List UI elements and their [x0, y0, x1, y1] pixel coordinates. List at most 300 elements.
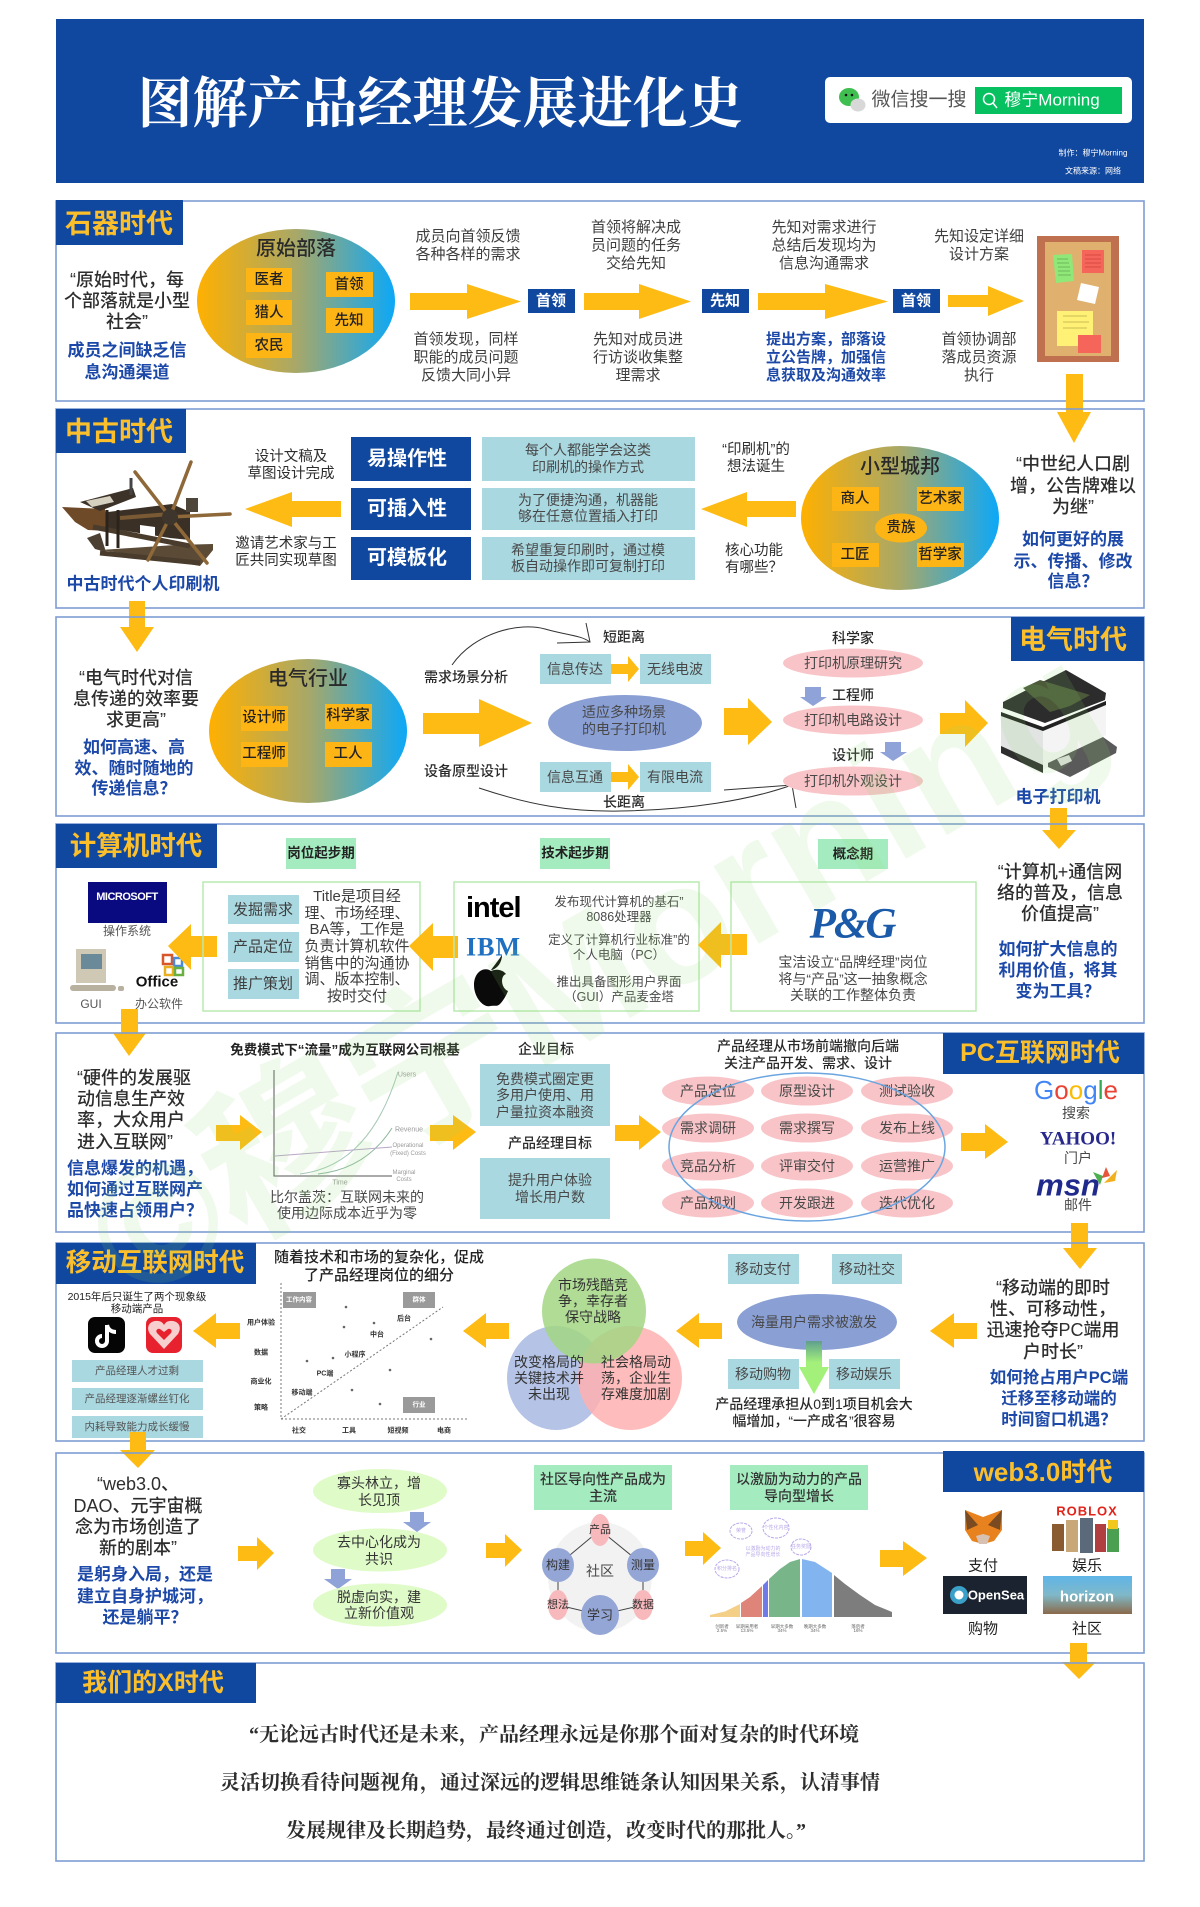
- line chart: Operational: [392, 1143, 424, 1149]
- scatter chart: 工作内容: [286, 1294, 312, 1304]
- icon: notice board: [1037, 236, 1119, 362]
- arrow: [961, 1124, 1008, 1159]
- text: from 0 to 1: 产品经理承担从0到1项目机会大: [715, 1396, 913, 1412]
- caption: 比尔盖茨：互联网未来的: [270, 1189, 424, 1205]
- frame: concept stage: 关联的工作整体负责: [790, 987, 916, 1003]
- text: idea: “印刷机”的: [722, 441, 790, 458]
- caption row 1: 娱乐: [1072, 1558, 1102, 1574]
- frame: job stage: 调、版本控制、: [304, 970, 410, 988]
- community label: 主流: [589, 1488, 617, 1504]
- arrow: to medieval: [1057, 374, 1091, 443]
- title: 图解产品经理发展进化史: [137, 74, 743, 134]
- feature boxes: 印刷机的操作方式: [532, 459, 644, 475]
- scatter chart: 后台: [397, 1314, 411, 1322]
- circle: small city: 工匠: [840, 546, 870, 563]
- arrow: [168, 924, 217, 970]
- heading: web3: [943, 1451, 1144, 1492]
- circle: electric industry: 科学家: [326, 706, 370, 724]
- arrow: [430, 1115, 476, 1150]
- credits: [1059, 148, 1127, 176]
- pink tasks grid: 运营推广: [879, 1158, 935, 1174]
- frame: concept stage: 宝洁设立“品牌经理”岗位: [778, 954, 928, 970]
- arrow: [193, 1313, 240, 1348]
- scatter chart: 工具: [342, 1426, 356, 1434]
- logos: portals: Google: [1034, 1075, 1118, 1105]
- scatter chart: 移动端: [292, 1388, 312, 1396]
- icon: metamask fox: [965, 1510, 1002, 1544]
- community diagram: 想法: [547, 1597, 569, 1611]
- bell curve chart: 积分排名: [717, 1565, 737, 1572]
- question: 信息爆发的机遇，: [67, 1158, 203, 1178]
- scatter chart: [247, 1283, 467, 1434]
- question: 示、传播、修改: [1014, 552, 1132, 570]
- question: 如何通过互联网产: [67, 1180, 203, 1198]
- arrow chain: 首领: [536, 292, 566, 310]
- frame: tech stage: 推出具备图形用户界面: [556, 974, 682, 989]
- bell curve chart: 落后者: [851, 1622, 865, 1630]
- text: idea: 想法诞生: [727, 458, 785, 475]
- line chart: Time: [332, 1180, 348, 1186]
- frame: tech stage: （GUI）产品麦金塔: [564, 989, 674, 1004]
- trend flow: 脱虚向实，建: [337, 1589, 421, 1605]
- pink tasks grid: 需求调研: [680, 1120, 736, 1136]
- scatter chart: 数据: [254, 1348, 268, 1356]
- community label: 社区导向性产品成为: [540, 1471, 666, 1487]
- scatter chart: 中台: [370, 1330, 384, 1338]
- step texts: 总结后发现均为: [771, 236, 877, 254]
- quote: 性、可移动性，: [990, 1299, 1116, 1319]
- bell curve chart: 16%: [853, 1628, 863, 1632]
- circle: primitive tribe: 原始部落: [256, 237, 336, 260]
- heading: computer: 计算机时代: [70, 831, 202, 861]
- frame: job stage: 推广策划: [233, 976, 293, 992]
- header banner: [56, 19, 1144, 183]
- pink tasks grid: 测试验收: [879, 1083, 935, 1099]
- curved connector: long: [479, 785, 796, 811]
- trend flow: 立新价值观: [344, 1605, 414, 1621]
- circle: electric industry: [209, 659, 407, 803]
- quote: 户时长”: [1023, 1342, 1083, 1362]
- step texts: 行访谈收集整: [593, 348, 683, 366]
- chart title: 了产品经理岗位的细分: [304, 1266, 454, 1284]
- heading: pc internet: [943, 1033, 1144, 1074]
- bell curve chart: 13.5%: [741, 1628, 753, 1632]
- step texts: 各种各样的需求: [415, 246, 521, 262]
- arrow: to mobile: [1063, 1223, 1097, 1269]
- frame: tech stage: 发布现代计算机的基石”: [554, 894, 684, 909]
- scatter chart: 社交: [292, 1426, 306, 1434]
- venn diagram: 存难度加剧: [601, 1386, 671, 1402]
- pink tasks grid: 需求撰写: [779, 1120, 835, 1136]
- bell curve chart: 晚期大多数: [804, 1622, 827, 1630]
- feature boxes: [351, 437, 695, 580]
- arrow: [245, 492, 341, 527]
- pink tasks grid: 发布上线: [879, 1120, 935, 1136]
- scatter chart: 电商: [437, 1426, 451, 1434]
- question: 利用价值，将其: [998, 960, 1118, 980]
- feature boxes: 够在任意位置插入打印: [518, 508, 658, 524]
- feature boxes: 希望重复印刷时，通过模: [511, 542, 665, 558]
- arrow chain: [410, 284, 1024, 319]
- icon: opensea: OpenSea: [968, 1588, 1025, 1602]
- venn diagram: 未出现: [528, 1386, 570, 1402]
- scatter chart: 小程序: [344, 1350, 366, 1358]
- step texts: 息获取及沟通效率: [766, 366, 886, 384]
- text: invite: 邀请艺术家与工: [235, 535, 337, 552]
- product icons: Office: [136, 974, 178, 990]
- mobile needs: [728, 1254, 902, 1394]
- wechat search box: 穆宁Morning: [1004, 90, 1100, 110]
- text: 2015: 2015年后只诞生了两个现象级: [68, 1290, 207, 1303]
- frame: job stage: 发掘需求: [233, 902, 293, 918]
- step texts: 执行: [964, 366, 994, 384]
- arrow: [615, 1115, 661, 1150]
- quote: 增，公告牌难以: [1010, 476, 1136, 496]
- logos: portals: msn: [1036, 1168, 1100, 1202]
- role flow: 工程师: [832, 687, 874, 703]
- frame: job stage: 产品定位: [233, 938, 293, 956]
- question: 如何扩大信息的: [998, 938, 1118, 958]
- circle: small city: [801, 446, 999, 590]
- question: 建立自身护城河，: [77, 1586, 213, 1606]
- circle: small city: 贵族: [886, 519, 916, 536]
- stage labels: 技术起步期: [541, 844, 609, 860]
- icon: horizon: horizon: [1060, 1588, 1114, 1606]
- icon: horizon: [1043, 1576, 1132, 1614]
- bell curve chart: 任务奖励: [791, 1543, 811, 1550]
- quote: “硬件的发展驱: [77, 1068, 191, 1088]
- feature boxes: 可插入性: [367, 497, 447, 520]
- panel: mobile internet: [56, 1243, 1144, 1468]
- caption: 使用边际成本近乎为零: [277, 1205, 417, 1221]
- logos: portals: 门户: [1064, 1150, 1092, 1166]
- text: core features: 核心功能: [725, 542, 783, 559]
- quote: 新的剧本”: [99, 1538, 177, 1558]
- product icons: MICROSOFT: [96, 891, 159, 903]
- circle: small city: 艺术家: [918, 490, 962, 507]
- step texts: 首领发现，同样: [413, 330, 519, 348]
- icon: roblox: ROBLOX: [1056, 1504, 1118, 1518]
- bell curve chart: 早期采用者: [736, 1622, 759, 1630]
- chart title: 随着技术和市场的复杂化，促成: [274, 1248, 484, 1266]
- bell curve chart: 2.5%: [717, 1628, 727, 1632]
- icon: tiktok: [88, 1317, 125, 1353]
- icon: pinduoduo: [146, 1317, 182, 1353]
- quote: 社会”: [106, 312, 148, 332]
- role flow: [783, 630, 923, 796]
- step texts: 首领将解决成: [591, 218, 681, 236]
- wechat search box: 微信搜一搜: [871, 88, 967, 110]
- icon: printer: [1001, 670, 1117, 777]
- frame: tech stage: 个人电脑（PC）: [573, 948, 665, 962]
- caption row 1: 支付: [968, 1558, 998, 1574]
- community label: [534, 1465, 672, 1510]
- question: 是躬身入局，还是: [77, 1564, 213, 1584]
- heading: medieval: 中古时代: [65, 417, 173, 447]
- bell curve chart: 34%: [810, 1628, 820, 1632]
- pink tasks grid: 产品定位: [680, 1083, 736, 1099]
- incentive label: [730, 1465, 868, 1510]
- text: design: 草图设计完成: [248, 465, 334, 482]
- arrow: [423, 699, 532, 747]
- arrow: [701, 492, 796, 527]
- quote: 迅速抢夺PC端用: [986, 1320, 1120, 1340]
- line chart: (Fixed) Costs: [390, 1151, 426, 1157]
- circle: primitive tribe: 首领: [334, 275, 364, 293]
- bell curve chart: 产品导向性增长: [745, 1551, 781, 1558]
- circle: primitive tribe: 先知: [334, 312, 364, 329]
- feature boxes: 板自动操作即可复制打印: [511, 558, 665, 574]
- panel: medieval: [56, 409, 1144, 652]
- circle: primitive tribe: [197, 229, 395, 373]
- quote: 率，大众用户: [77, 1110, 185, 1130]
- scatter chart: 行业: [412, 1400, 426, 1408]
- frame: job stage: 理、市场经理、: [304, 904, 410, 922]
- text: design: 设计文稿及: [255, 448, 327, 465]
- step texts: 先知设定详细: [934, 228, 1024, 244]
- goals: 增长用户数: [515, 1189, 585, 1205]
- arrow: [724, 698, 772, 745]
- scenario boxes: 信息传达: [547, 661, 603, 677]
- product icons: 操作系统: [103, 923, 151, 938]
- community diagram: [542, 1514, 659, 1635]
- trend flow: 寡头林立，增: [337, 1475, 421, 1491]
- role flow: 打印机电路设计: [804, 712, 902, 728]
- scenario boxes: 信息互通: [547, 769, 603, 785]
- pink tasks grid: 迭代优化: [879, 1195, 935, 1211]
- ellipse: electronic printer: 的电子打印机: [582, 721, 666, 737]
- pink tasks grid: 竞品分析: [680, 1158, 736, 1174]
- arrow: [940, 700, 988, 747]
- step texts: 先知对成员进: [593, 330, 683, 348]
- line chart: Marginal: [392, 1170, 416, 1176]
- bell curve chart: [710, 1518, 892, 1632]
- community diagram: 数据: [632, 1597, 654, 1611]
- feature boxes: 为了便捷沟通，机器能: [518, 492, 658, 508]
- frame: concept stage: P&G: [809, 900, 896, 948]
- scatter chart: 短视频: [388, 1426, 408, 1434]
- venn diagram: 保守战略: [565, 1309, 621, 1325]
- result list: 产品经理逐渐螺丝钉化: [84, 1392, 190, 1405]
- step texts: 理需求: [615, 366, 661, 384]
- quote: 个部落就是小型: [64, 291, 190, 311]
- heading: mobile: [56, 1243, 256, 1284]
- stage labels: 概念期: [833, 846, 873, 862]
- step texts: 信息沟通需求: [779, 254, 869, 272]
- bell curve chart: 早期大多数: [771, 1622, 794, 1630]
- goals: 多用户使用、用: [496, 1087, 594, 1103]
- circle: primitive tribe: 农民: [254, 337, 284, 354]
- product icons: 办公软件: [135, 996, 183, 1011]
- scenario boxes: 无线电波: [647, 661, 703, 677]
- quote: 为继”: [1052, 497, 1094, 517]
- question: 变为工具？: [1016, 980, 1100, 1000]
- step texts: 设计方案: [949, 244, 1009, 262]
- stage labels: 岗位起步期: [287, 844, 355, 860]
- feature boxes: 可模板化: [367, 546, 447, 569]
- circle: electric industry: 工人: [334, 745, 363, 762]
- heading: stone age: [56, 200, 183, 245]
- goals: 户量拉资本融资: [496, 1104, 594, 1120]
- quote: 念为市场创造了: [75, 1516, 201, 1537]
- arrow: [216, 1115, 262, 1150]
- pink tasks grid: 评审交付: [779, 1158, 835, 1174]
- caption row 2: 购物: [968, 1620, 998, 1638]
- bell curve chart: 创新者: [715, 1622, 729, 1630]
- scatter chart: 群体: [412, 1294, 426, 1304]
- role flow: 科学家: [832, 630, 874, 646]
- quote: 进入互联网”: [77, 1132, 173, 1152]
- venn diagram: 改变格局的: [514, 1354, 584, 1370]
- heading: X era: 我们的X时代: [82, 1669, 224, 1697]
- arrow chain: 首领: [901, 292, 931, 310]
- caption row 2: 社区: [1072, 1620, 1102, 1638]
- venn diagram: 荡，企业生: [601, 1370, 671, 1386]
- closing statement: 发展规律及长期趋势，最终通过创造，改变时代的那批人。”: [286, 1818, 806, 1842]
- logos: portals: YAHOO!: [1040, 1128, 1116, 1150]
- frame: concept stage: [731, 882, 976, 1011]
- heading: web3: web3.0时代: [973, 1457, 1112, 1487]
- arrow: [463, 1313, 509, 1348]
- arrow: [930, 1313, 977, 1348]
- trend flow: [313, 1469, 447, 1626]
- heading: medieval: [56, 409, 186, 453]
- caption row 1: [968, 1558, 1102, 1574]
- arrow: [486, 1534, 522, 1567]
- caption row 2: [968, 1620, 1102, 1638]
- line chart: Costs: [396, 1177, 412, 1183]
- quote: “原始时代，每: [70, 270, 184, 290]
- question: 息沟通渠道: [84, 362, 170, 382]
- stage labels: [286, 838, 888, 869]
- scatter chart: PC端: [317, 1368, 333, 1378]
- mobile needs: 海量用户需求被激发: [751, 1314, 877, 1330]
- scenario boxes: [540, 654, 711, 792]
- venn diagram: 社会格局动: [601, 1354, 671, 1370]
- goals: 产品经理目标: [508, 1135, 592, 1151]
- line chart: Revenue: [395, 1126, 423, 1134]
- step texts: 落成员资源: [941, 348, 1017, 366]
- closing statement: 灵活切换看待问题视角，通过深远的逻辑思维链条认知因果关系，认清事情: [220, 1770, 880, 1794]
- credits: 制作：穆宁Morning: [1059, 148, 1127, 158]
- frame: tech stage: 8086处理器: [586, 910, 652, 924]
- frame: concept stage: 将与“产品”这一抽象概念: [778, 971, 928, 987]
- arrow chain: 先知: [710, 292, 740, 310]
- text: from 0 to 1: 幅增加，“一产成名”很容易: [732, 1413, 896, 1429]
- venn diagram: 争，幸存者: [558, 1293, 628, 1309]
- step texts: 立公告牌，加强信: [766, 348, 886, 366]
- trend flow: 长见顶: [358, 1492, 400, 1508]
- arrow: to web3: [120, 1432, 155, 1468]
- caption: press: 中古时代个人印刷机: [66, 574, 220, 594]
- frame: job stage: 负责计算机软件: [304, 936, 410, 954]
- scatter chart: 用户体验: [247, 1318, 275, 1326]
- circle: small city: 商人: [840, 490, 870, 507]
- question: 如何更好的展: [1022, 530, 1124, 548]
- arrow: to computer: [1042, 808, 1076, 849]
- bell curve chart: 个性化内容: [763, 1524, 789, 1531]
- logos: portals: 邮件: [1064, 1197, 1092, 1213]
- incentive label: 导向型增长: [764, 1488, 834, 1504]
- role flow: 打印机外观设计: [804, 773, 902, 789]
- watermark: ©穆宁Morning: [57, 605, 1135, 1337]
- question: 还是躺平？: [102, 1608, 188, 1626]
- quote: “计算机+通信网: [998, 862, 1122, 882]
- text: core features: 有哪些？: [725, 559, 783, 576]
- scenario boxes: 有限电流: [647, 769, 703, 785]
- step texts: 反馈大同小异: [421, 366, 511, 384]
- line chart: [274, 1070, 426, 1186]
- heading: stone age: 石器时代: [65, 209, 173, 239]
- venn diagram: 市场残酷竞: [558, 1277, 628, 1293]
- text: PM shift: 关注产品开发、需求、设计: [724, 1055, 892, 1071]
- frame: tech stage: intel: [466, 892, 521, 924]
- question: 时间窗口机遇？: [1001, 1409, 1117, 1429]
- circle: electric industry: 电气行业: [268, 667, 348, 690]
- circle: electric industry: 工程师: [242, 745, 286, 762]
- feature boxes: 每个人都能学会这类: [525, 442, 651, 458]
- panel: web3: [56, 1451, 1144, 1679]
- labels: 短距离: [603, 629, 645, 645]
- arrow: to X: [1062, 1643, 1096, 1679]
- ellipse: electronic printer: [548, 695, 702, 751]
- quote: “电气时代对信: [79, 668, 193, 688]
- frame: job stage: [203, 882, 420, 1011]
- mobile needs: 移动购物: [735, 1366, 791, 1382]
- role flow: 打印机原理研究: [804, 655, 902, 671]
- community diagram: 测量: [631, 1558, 655, 1572]
- credits: 文稿来源：网络: [1065, 166, 1121, 176]
- community diagram: 社区: [586, 1563, 614, 1579]
- question: 传递信息？: [92, 778, 176, 798]
- heading: X era: [56, 1663, 256, 1703]
- pink tasks grid: 产品规划: [680, 1195, 736, 1211]
- quote: 动信息生产效: [77, 1089, 185, 1109]
- circle: small city: 哲学家: [918, 545, 962, 563]
- result list: 产品经理人才过剩: [95, 1364, 179, 1377]
- quote: DAO、元宇宙概: [73, 1496, 203, 1516]
- frame: job stage: Title是项目经: [313, 888, 401, 904]
- quote: “中世纪人口剧: [1016, 454, 1130, 474]
- circle: primitive tribe: 猎人: [254, 304, 284, 321]
- quote: “web3.0、: [97, 1474, 179, 1494]
- quote: 求更高”: [106, 710, 166, 730]
- community diagram: 构建: [546, 1557, 570, 1572]
- bell curve chart: 以激励为动力的: [745, 1545, 781, 1552]
- text: invite: 匠共同实现草图: [235, 552, 337, 569]
- arrow: [685, 1532, 721, 1565]
- step texts: 首领协调部: [941, 330, 1017, 348]
- panel: computer: [56, 824, 1144, 1056]
- step texts: 提出方案，部落设: [766, 330, 886, 348]
- question: 成员之间缺乏信: [68, 340, 186, 360]
- quote: “移动端的即时: [996, 1278, 1110, 1298]
- goals: 提升用户体验: [508, 1172, 592, 1188]
- goals: 企业目标: [518, 1041, 574, 1057]
- question: 如何高速、高: [83, 736, 185, 756]
- step texts: [413, 218, 1024, 384]
- panel: electric: [56, 617, 1144, 849]
- mobile needs: 移动社交: [839, 1261, 895, 1277]
- quote: 价值提高”: [1021, 904, 1099, 924]
- arrow: [880, 1541, 927, 1576]
- goals: 免费模式圈定更: [496, 1071, 594, 1087]
- step texts: 先知对需求进行: [771, 218, 877, 236]
- labels: [424, 629, 645, 810]
- frame: job stage: 按时交付: [327, 986, 387, 1004]
- frame: tech stage: 定义了计算机行业标准”的: [548, 932, 690, 947]
- heading: electric: [1011, 617, 1144, 661]
